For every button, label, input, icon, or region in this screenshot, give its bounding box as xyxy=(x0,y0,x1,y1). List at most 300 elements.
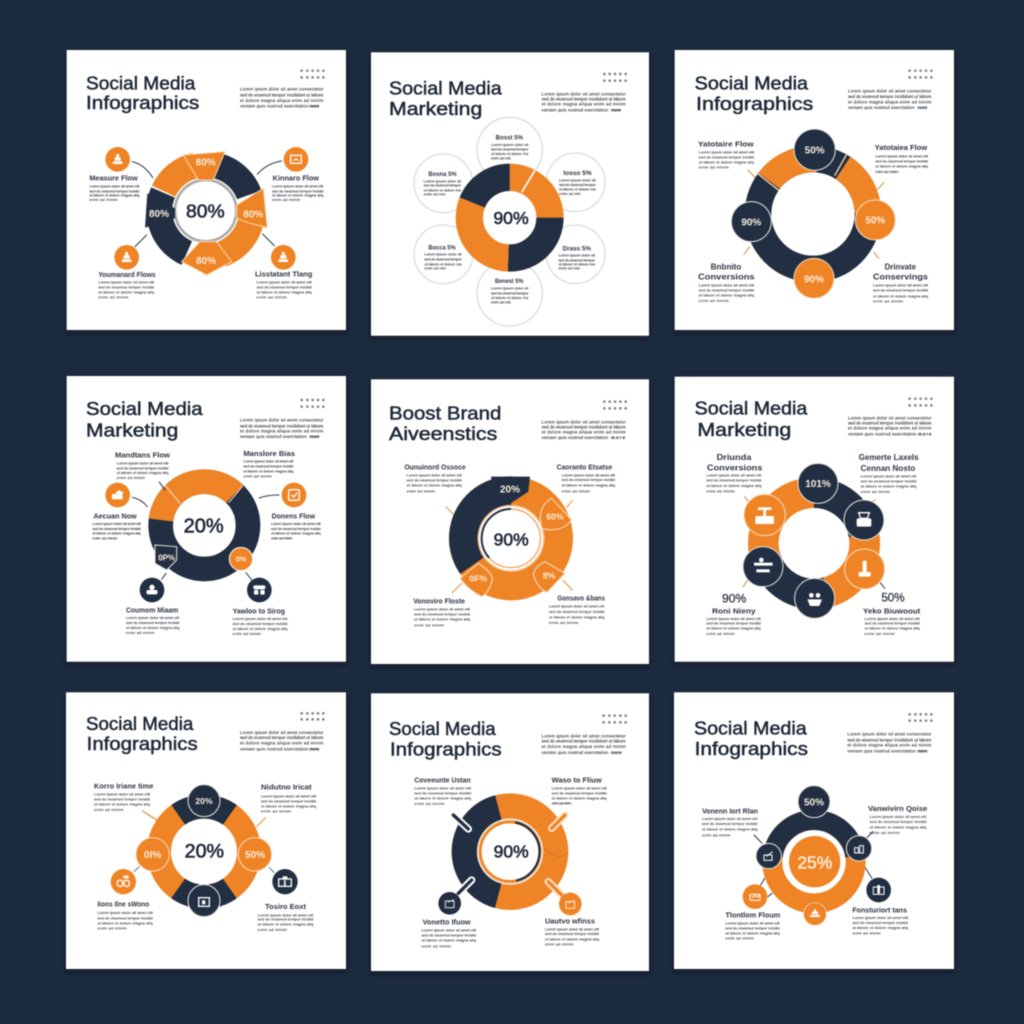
label: bottom left: Lorem ipsum dolor sit amet elit xyxy=(422,928,477,933)
icon: bottom right xyxy=(559,893,582,915)
donut tag: right 60%: 60% xyxy=(546,511,564,521)
icon: bottom left xyxy=(438,892,461,915)
label: top left: enim ad minim xyxy=(706,488,735,493)
intro text: veniam quis nostrud exercitation xyxy=(542,750,609,755)
intro text: Lorem ipsum dolor sit amet consectetur xyxy=(542,733,626,738)
label: bottom right: enim ad minim xyxy=(865,631,895,636)
label: bottom right: Conservings xyxy=(873,271,928,281)
bubble: bottom: enim ad min xyxy=(491,299,511,304)
label: top right: ut labore et dolore magna aliq xyxy=(261,804,316,809)
title: Infographics xyxy=(87,733,198,754)
label: bottom right: Gonsavo &bans xyxy=(557,595,605,602)
title xyxy=(695,397,808,440)
title: Aiveenstics xyxy=(389,423,497,444)
label: top right: Waso to Fliuw xyxy=(552,777,602,784)
label: top left xyxy=(89,176,140,202)
intro text: Lorem ipsum dolor sit amet consectetur xyxy=(542,92,626,97)
panel: card 3 social media infographics xyxy=(675,50,954,330)
donut tag: right xyxy=(229,547,253,571)
bubble: top right: Iosso 5% xyxy=(563,171,592,177)
label: top right xyxy=(868,806,927,835)
label: bottom left: Coumom Miaam xyxy=(126,608,178,615)
label: bottom right: sed do eiusmod tempor incidid xyxy=(257,284,312,289)
label: top left: enim ad minim xyxy=(414,801,445,806)
label: mid left: enim ad minim xyxy=(92,535,118,540)
intro text: et dolore magna aliqua enim ad minim xyxy=(542,744,626,749)
bubble: bottom: sed do eiusmod tempor xyxy=(491,290,529,295)
connector: lower right xyxy=(880,583,885,588)
label: top right: ut labore et dolore magna aliq xyxy=(272,193,323,198)
title xyxy=(86,713,198,754)
label: bottom right: Yeko Biuwoout xyxy=(863,608,921,615)
label: bottom left: enim ad minim xyxy=(97,925,127,930)
label: top right xyxy=(875,145,929,174)
label: bottom right: 50% xyxy=(881,591,905,605)
donut chart xyxy=(156,477,253,574)
donut chart xyxy=(445,472,577,605)
icon: right xyxy=(282,483,306,507)
center value: 90% xyxy=(493,208,529,228)
label: bottom right xyxy=(852,907,909,936)
bubble: top right: enim ad min xyxy=(559,191,581,196)
label: top right: ut labore et dolore magna aliq xyxy=(552,796,607,801)
bubble: top left: ut labore et dolore ma xyxy=(424,187,462,192)
donut tag: lower right xyxy=(533,562,565,593)
label: bottom left: sed do eiusmod tempor incidid xyxy=(422,932,476,937)
donut chart xyxy=(456,164,564,272)
label: mid right: ut labore et dolore magna aliq xyxy=(271,531,321,536)
label: top right xyxy=(261,784,317,814)
label: mid left: ut labore et dolore magna aliq xyxy=(92,531,141,536)
badge: top 50% xyxy=(798,786,830,818)
label: bottom left xyxy=(413,598,471,627)
label: bottom right xyxy=(258,904,314,932)
title xyxy=(694,717,808,759)
label: top right: Lorem ipsum dolor sit amet elit xyxy=(861,473,917,478)
label: bottom left xyxy=(126,608,180,635)
ticks xyxy=(744,170,884,258)
badge: top 101% xyxy=(798,463,838,503)
label: bottom right: ut labore et dolore magna aliq xyxy=(545,936,599,941)
label: bottom left: ut labore et dolore magna aliq xyxy=(126,625,179,630)
icon: bottom left xyxy=(140,578,164,602)
label: top left xyxy=(115,453,171,480)
title: Social Media xyxy=(695,72,809,93)
label: top left: sed do eiusmod tempor incidid xyxy=(117,465,168,470)
pin: bottom right xyxy=(548,882,562,895)
connector: bottom right xyxy=(263,234,274,246)
intro text: more xyxy=(611,108,622,113)
label: bottom right xyxy=(549,595,605,625)
label: top right: sed do eiusmod tempor incidid xyxy=(562,477,615,482)
bubble: lower right: sed do eiusmod tempor xyxy=(558,257,596,262)
pagination dots xyxy=(908,713,933,722)
label: bottom right: Lorem ipsum dolor sit amet elit xyxy=(865,616,921,621)
label: bottom left: enim ad minim xyxy=(126,630,155,635)
label: top left: ut labore et dolore magna aliq xyxy=(414,796,471,801)
donut tag: lower right: 8% xyxy=(543,570,556,580)
intro text: Lorem ipsum dolor sit amet consectetur xyxy=(240,417,324,422)
label: top right: sed do eiusmod tempor incidid xyxy=(870,819,926,824)
intro text: veniam quis nostrud exercitation xyxy=(542,435,609,440)
bubble: top left: enim ad min xyxy=(424,192,445,197)
connector: top left xyxy=(132,162,153,178)
center value: 90% xyxy=(494,530,529,550)
label: mid right: Donens Flow xyxy=(272,513,316,520)
label: top right: ut labore et dolore magna aliq xyxy=(562,482,615,487)
label: top left: enim ad minim xyxy=(117,475,146,480)
icon: top right xyxy=(284,147,308,172)
label: top left: ut labore et dolore magna aliq xyxy=(702,827,757,832)
label: bottom left: enim ad minim xyxy=(725,936,754,941)
intro text: et dolore magna aliqua enim ad minim xyxy=(240,428,324,433)
label: bottom left: ut labore et dolore magna aliq xyxy=(98,289,154,294)
bubble: bottom: ut labore et dolore ma xyxy=(491,295,529,300)
label: top left: Yatotaire Flow xyxy=(698,141,754,148)
donut tag: top 20%: 20% xyxy=(500,484,520,495)
label: bottom right: ut labore et dolore magna aliq xyxy=(549,614,604,619)
donut tag: top 80%: 80% xyxy=(196,158,216,169)
label: bottom right: ut labore et dolore magna aliq xyxy=(865,626,920,631)
label: bottom right: Yawloo to Sirog xyxy=(233,608,285,615)
label: top right: enim ad minim xyxy=(243,474,272,479)
bubble: top left: Bosna 5% xyxy=(428,172,457,178)
label: bottom right: Lorem ipsum dolor sit amet elit xyxy=(873,282,929,287)
label: bottom right xyxy=(255,272,313,299)
intro text: Lorem ipsum dolor sit amet consectetur xyxy=(848,88,932,93)
bubble: top: Bosst 5% xyxy=(496,136,524,142)
bubble: top: ut labore et dolore ma xyxy=(491,151,529,156)
intro text xyxy=(240,87,324,109)
label: bottom right: Tosiro Eoxt xyxy=(265,904,307,911)
label: top left: Measure Flow xyxy=(89,176,138,183)
label: top left xyxy=(94,783,153,812)
pin: top left xyxy=(453,815,468,829)
panel: card 1 social media infographics xyxy=(67,50,346,330)
label: top right: sed do eiusmod tempor incidid xyxy=(261,798,316,803)
label: top left xyxy=(698,141,755,170)
label: bottom left xyxy=(698,262,755,303)
bubble: top: enim ad min xyxy=(491,156,511,161)
label: bottom right: enim ad minim xyxy=(258,927,288,932)
label: bottom left: enim ad minim xyxy=(706,631,735,636)
title: Marketing xyxy=(86,420,178,441)
ticks xyxy=(446,501,572,593)
label: mid left: Aecuan Now xyxy=(93,513,137,520)
bubble: top: Lorem ipsum dolor sit xyxy=(491,142,529,147)
icon: right xyxy=(846,836,872,861)
title: Social Media xyxy=(695,397,808,418)
label: bottom right: ut labore et dolore magna aliq xyxy=(257,289,312,294)
ring chart xyxy=(736,137,890,291)
label: bottom right: sed do eiusmod tempor incidid xyxy=(873,288,928,293)
label: top right: Manslore Bias xyxy=(243,451,295,458)
bubble: top right xyxy=(546,153,605,212)
ring chart xyxy=(768,815,860,908)
center value: 80% xyxy=(186,200,225,221)
label: mid left: Lorem ipsum dolor sit amet elit xyxy=(92,521,142,526)
badge: bottom xyxy=(794,258,834,298)
label: bottom left: ut labore et dolore magna aliq xyxy=(706,626,761,631)
pin: bottom left xyxy=(458,880,472,893)
bubble: lower left: ut labore et dolore ma xyxy=(424,262,462,267)
label: bottom right: Lorem ipsum dolor sit amet elit xyxy=(233,616,288,621)
bubble: top left: Lorem ipsum dolor sit xyxy=(424,178,462,183)
label: top left: Lorem ipsum dolor sit amet elit xyxy=(699,150,755,155)
label: top right: enim ad minim xyxy=(272,197,301,202)
intro text: Lorem ipsum dolor sit amet consectetur xyxy=(240,87,324,92)
bubble: lower left: Lorem ipsum dolor sit xyxy=(424,252,463,257)
title: Infographics xyxy=(695,738,808,759)
connector: lower right xyxy=(269,868,274,872)
bubble: top: sed do eiusmod tempor xyxy=(491,146,529,151)
icon badge: lower left xyxy=(743,547,783,587)
intro text: sed do eiusmod tempor incididunt ut labore xyxy=(542,424,626,429)
label: top right xyxy=(859,452,919,494)
label: top left: enim ad minim xyxy=(94,807,124,812)
label: bottom right: sed do eiusmod tempor incidid xyxy=(549,609,604,614)
label: bottom left: sed do eiusmod tempor incidid xyxy=(414,612,470,617)
label: top right: enim ad minim xyxy=(870,830,900,835)
label: top right: Vanwivirn Qoise xyxy=(868,806,927,813)
panel: card 2 social media marketing xyxy=(371,52,649,336)
icon: bottom xyxy=(804,903,826,925)
label: top right: sed do eiusmod tempor incidid xyxy=(875,158,928,163)
donut tag: top 20% xyxy=(491,477,530,503)
ticks xyxy=(743,497,875,587)
label: bottom left: enim ad minim xyxy=(422,943,452,948)
intro text: et dolore magna aliqua enim ad minim xyxy=(240,741,324,746)
icon: bottom left xyxy=(114,245,139,270)
label: bottom left xyxy=(725,913,781,941)
label: bottom left xyxy=(98,272,156,299)
intro text: sed do eiusmod tempor incididunt ut labore xyxy=(848,94,932,99)
panel: card 9 social media infographics xyxy=(674,692,954,969)
bubble: bottom: Benest 5% xyxy=(495,279,524,285)
title: Social Media xyxy=(694,717,807,738)
label: bottom left: ut labore et dolore magna aliq xyxy=(97,920,153,925)
label: top right: Yatotaiea Flow xyxy=(875,145,928,152)
intro text: veniam quis nostrud exercitation xyxy=(240,434,307,439)
label: bottom right: Uautvo wfinss xyxy=(545,918,595,925)
pin: top right xyxy=(552,815,565,828)
bubble: bottom xyxy=(477,261,542,326)
bubble: top left xyxy=(414,154,473,213)
intro text: sed do eiusmod tempor incididunt ut labore xyxy=(240,423,324,428)
intro text: sed do eiusmod tempor incididunt ut labore xyxy=(542,97,626,102)
donut tag: left 80%: 80% xyxy=(149,209,169,220)
donut tag: bottom 80%: 80% xyxy=(196,256,216,267)
label: top left: Lorem ipsum dolor sit amet elit xyxy=(414,786,472,791)
icon: bottom right xyxy=(247,578,272,602)
label: bottom right: Lorem ipsum dolor sit amet elit xyxy=(258,912,314,917)
center value: 20% xyxy=(184,516,224,538)
label: bottom left: Lorem ipsum dolor sit amet elit xyxy=(414,607,471,612)
label: top left: Lorem ipsum dolor sit amet elit xyxy=(89,184,140,189)
label: bottom left: sed do eiusmod tempor incidid xyxy=(706,621,761,626)
intro text: sed do eiusmod tempor incididunt ut labore xyxy=(240,93,324,98)
label: top left: ut labore et dolore magna aliq xyxy=(117,470,168,475)
badge: right: 50% xyxy=(865,216,885,227)
bubble: lower left: sed do eiusmod tempor xyxy=(424,257,462,262)
connector: bottom right xyxy=(246,573,252,580)
pagination dots xyxy=(300,712,325,721)
bubble: top right: sed do eiusmod tempor xyxy=(559,182,596,187)
label: bottom right: ut labore et dolore magna aliq xyxy=(852,925,908,930)
intro text: sed do eiusmod tempor incididunt ut labore xyxy=(847,737,932,742)
intro text: et dolore magna aliqua enim ad minim xyxy=(847,743,932,748)
label: top right: ut labore et dolore magna aliq xyxy=(875,164,928,169)
label: top right: enim ad minim xyxy=(562,488,591,493)
icon badge: upper left xyxy=(744,494,785,536)
label: top right xyxy=(557,464,616,493)
bubble: top xyxy=(477,117,542,183)
label: top right: sed do eiusmod tempor incidid xyxy=(861,478,916,483)
center value 25%: 25% xyxy=(797,852,832,872)
label: bottom right: sed do eiusmod tempor incidid xyxy=(233,621,287,626)
intro text xyxy=(847,732,932,753)
title: Social Media xyxy=(389,718,496,739)
intro text: sed do eiusmod tempor incididunt ut labore xyxy=(848,421,932,426)
label: bottom left: enim ad minim xyxy=(414,622,445,627)
intro text xyxy=(240,417,324,439)
title: Marketing xyxy=(389,98,482,119)
label: bottom left: Lorem ipsum dolor sit amet elit xyxy=(699,282,755,287)
intro text xyxy=(542,733,626,755)
label: bottom left: enim ad minim xyxy=(98,294,129,299)
intro text xyxy=(240,730,324,752)
label: top left: Coveeunte Ustan xyxy=(414,777,471,784)
label: bottom left: Bnbnito xyxy=(711,262,741,271)
label: top left: sed do eiusmod tempor incidid xyxy=(702,821,757,826)
label: bottom left: sed do eiusmod tempor incidid xyxy=(725,926,780,931)
label: top right: Lorem ipsum dolor sit amet elit xyxy=(870,814,927,819)
title: Infographics xyxy=(696,93,813,114)
title xyxy=(389,718,502,760)
intro text xyxy=(848,416,932,437)
intro text: veniam quis nostrud exercitation xyxy=(848,432,917,437)
intro text: more xyxy=(917,105,928,110)
pagination dots xyxy=(603,400,627,410)
label: bottom right: enim ad minim xyxy=(545,942,574,947)
label: bottom left xyxy=(706,591,762,636)
title xyxy=(389,77,502,119)
label: bottom right: ut labore et dolore magna aliq xyxy=(233,626,287,631)
label: top left: ut labore et dolore magna aliq xyxy=(94,802,150,807)
icon: far right xyxy=(866,878,891,902)
label: top left: sed do eiusmod tempor incidid xyxy=(407,477,462,482)
title: Social Media xyxy=(389,77,502,98)
badge: right 50% xyxy=(238,838,272,871)
icon: lower left xyxy=(743,884,767,909)
badge: top 20% xyxy=(188,785,220,817)
connector: bottom left xyxy=(135,235,147,247)
label: top right: Lorem ipsum dolor sit amet elit xyxy=(875,153,929,158)
label: top left: sed do eiusmod tempor incidid xyxy=(414,790,471,795)
label: top right: Cennan Nosto xyxy=(861,464,915,473)
badge: left xyxy=(136,838,169,871)
connector: right xyxy=(259,495,279,498)
label: bottom left: ut labore et dolore magna aliq xyxy=(699,292,754,297)
label: top right: Lorem ipsum dolor sit amet elit xyxy=(243,458,294,463)
panel: card 5 boost brand xyxy=(371,379,649,664)
label: top left: Driunda xyxy=(717,452,752,462)
label: bottom left: Lorem ipsum dolor sit amet elit xyxy=(98,279,155,284)
intro text: veniam quis nostrud exercitation xyxy=(848,105,915,110)
title: Social Media xyxy=(86,398,203,419)
intro text: et dolore magna aliqua enim ad minim xyxy=(542,102,626,107)
intro text: veniam quis nostrud exercitation xyxy=(240,104,309,109)
intro text xyxy=(542,419,626,440)
badge: top 50%: 50% xyxy=(804,797,824,808)
label: bottom right: Lorem ipsum dolor sit amet elit xyxy=(545,927,600,932)
badge: left: 0I% xyxy=(144,850,161,861)
donut tag: right 80% xyxy=(237,188,267,228)
panel: card 8 social media infographics xyxy=(371,693,649,971)
label: top left xyxy=(702,808,758,837)
icon badge: bottom xyxy=(188,885,220,917)
label: top left: ut labore et dolore magna aliq xyxy=(699,159,754,164)
label: bottom right: sed do eiusmod tempor incidid xyxy=(865,621,920,626)
intro text: et dolore magna aliqua enim ad minim xyxy=(542,429,626,434)
badge: right 50%: 50% xyxy=(245,850,265,861)
pagination dots xyxy=(908,69,933,79)
label: top left: enim ad minim xyxy=(702,832,731,837)
label: bottom left: Lorem ipsum dolor sit amet elit xyxy=(706,616,762,621)
panel: card 6 social media marketing xyxy=(675,377,954,662)
donut chart xyxy=(454,796,568,908)
label: mid left: sed do eiusmod tempor incidid xyxy=(92,526,141,531)
label: top right: ut labore et dolore magna aliq xyxy=(870,824,926,829)
intro text: sed do eiusmod tempor incididunt ut labore xyxy=(542,738,626,743)
label: bottom left: 90% xyxy=(722,591,747,605)
donut tag: right 60% xyxy=(540,498,572,530)
label: top right: ut labore et dolore magna aliq xyxy=(861,484,916,489)
label: bottom right: ut labore et dolore magna aliq xyxy=(873,293,928,298)
center value: 90% xyxy=(494,842,529,862)
intro text: et dolore magna aliqua enim ad minim xyxy=(240,98,324,103)
label: bottom right: ut labore et dolore magna aliq xyxy=(258,922,313,927)
label: mid right xyxy=(271,513,322,540)
label: top right xyxy=(272,175,324,202)
bubble: top left: sed do eiusmod tempor xyxy=(424,183,462,188)
label: top left: Vonenn Iort Rlan xyxy=(702,808,758,815)
label: top right: sed do eiusmod tempor incidid xyxy=(272,188,323,193)
label: top left: enim ad minim xyxy=(89,197,118,202)
label: top left: enim ad minim xyxy=(407,488,436,493)
icon badge: bottom xyxy=(795,578,835,618)
label: bottom left: ut labore et dolore magna aliq xyxy=(725,931,780,936)
label: top left: Lorem ipsum dolor sit amet elit xyxy=(706,473,762,478)
label: bottom right xyxy=(545,918,600,947)
icon: bottom right xyxy=(271,245,296,270)
label: mid right: sed do eiusmod tempor incidid xyxy=(271,526,321,531)
label: mid right: enim ad minim xyxy=(271,535,293,540)
label: top left: Conversions xyxy=(707,463,763,473)
label: bottom left: Lorem ipsum dolor sit amet elit xyxy=(97,910,154,915)
label: top right: Kinnaro Flow xyxy=(273,175,320,182)
badge: top xyxy=(794,129,835,170)
title: Infographics xyxy=(86,92,199,113)
label: bottom right: Drinvate xyxy=(885,262,917,271)
label: top left: Lorem ipsum dolor sit amet elit xyxy=(117,461,169,466)
title: Social Media xyxy=(86,713,194,734)
pagination dots xyxy=(300,69,325,79)
intro text: veniam quis nostrud exercitation xyxy=(240,747,309,752)
title xyxy=(389,402,501,444)
label: bottom right: enim ad minim xyxy=(549,620,579,625)
ticks xyxy=(143,811,266,827)
